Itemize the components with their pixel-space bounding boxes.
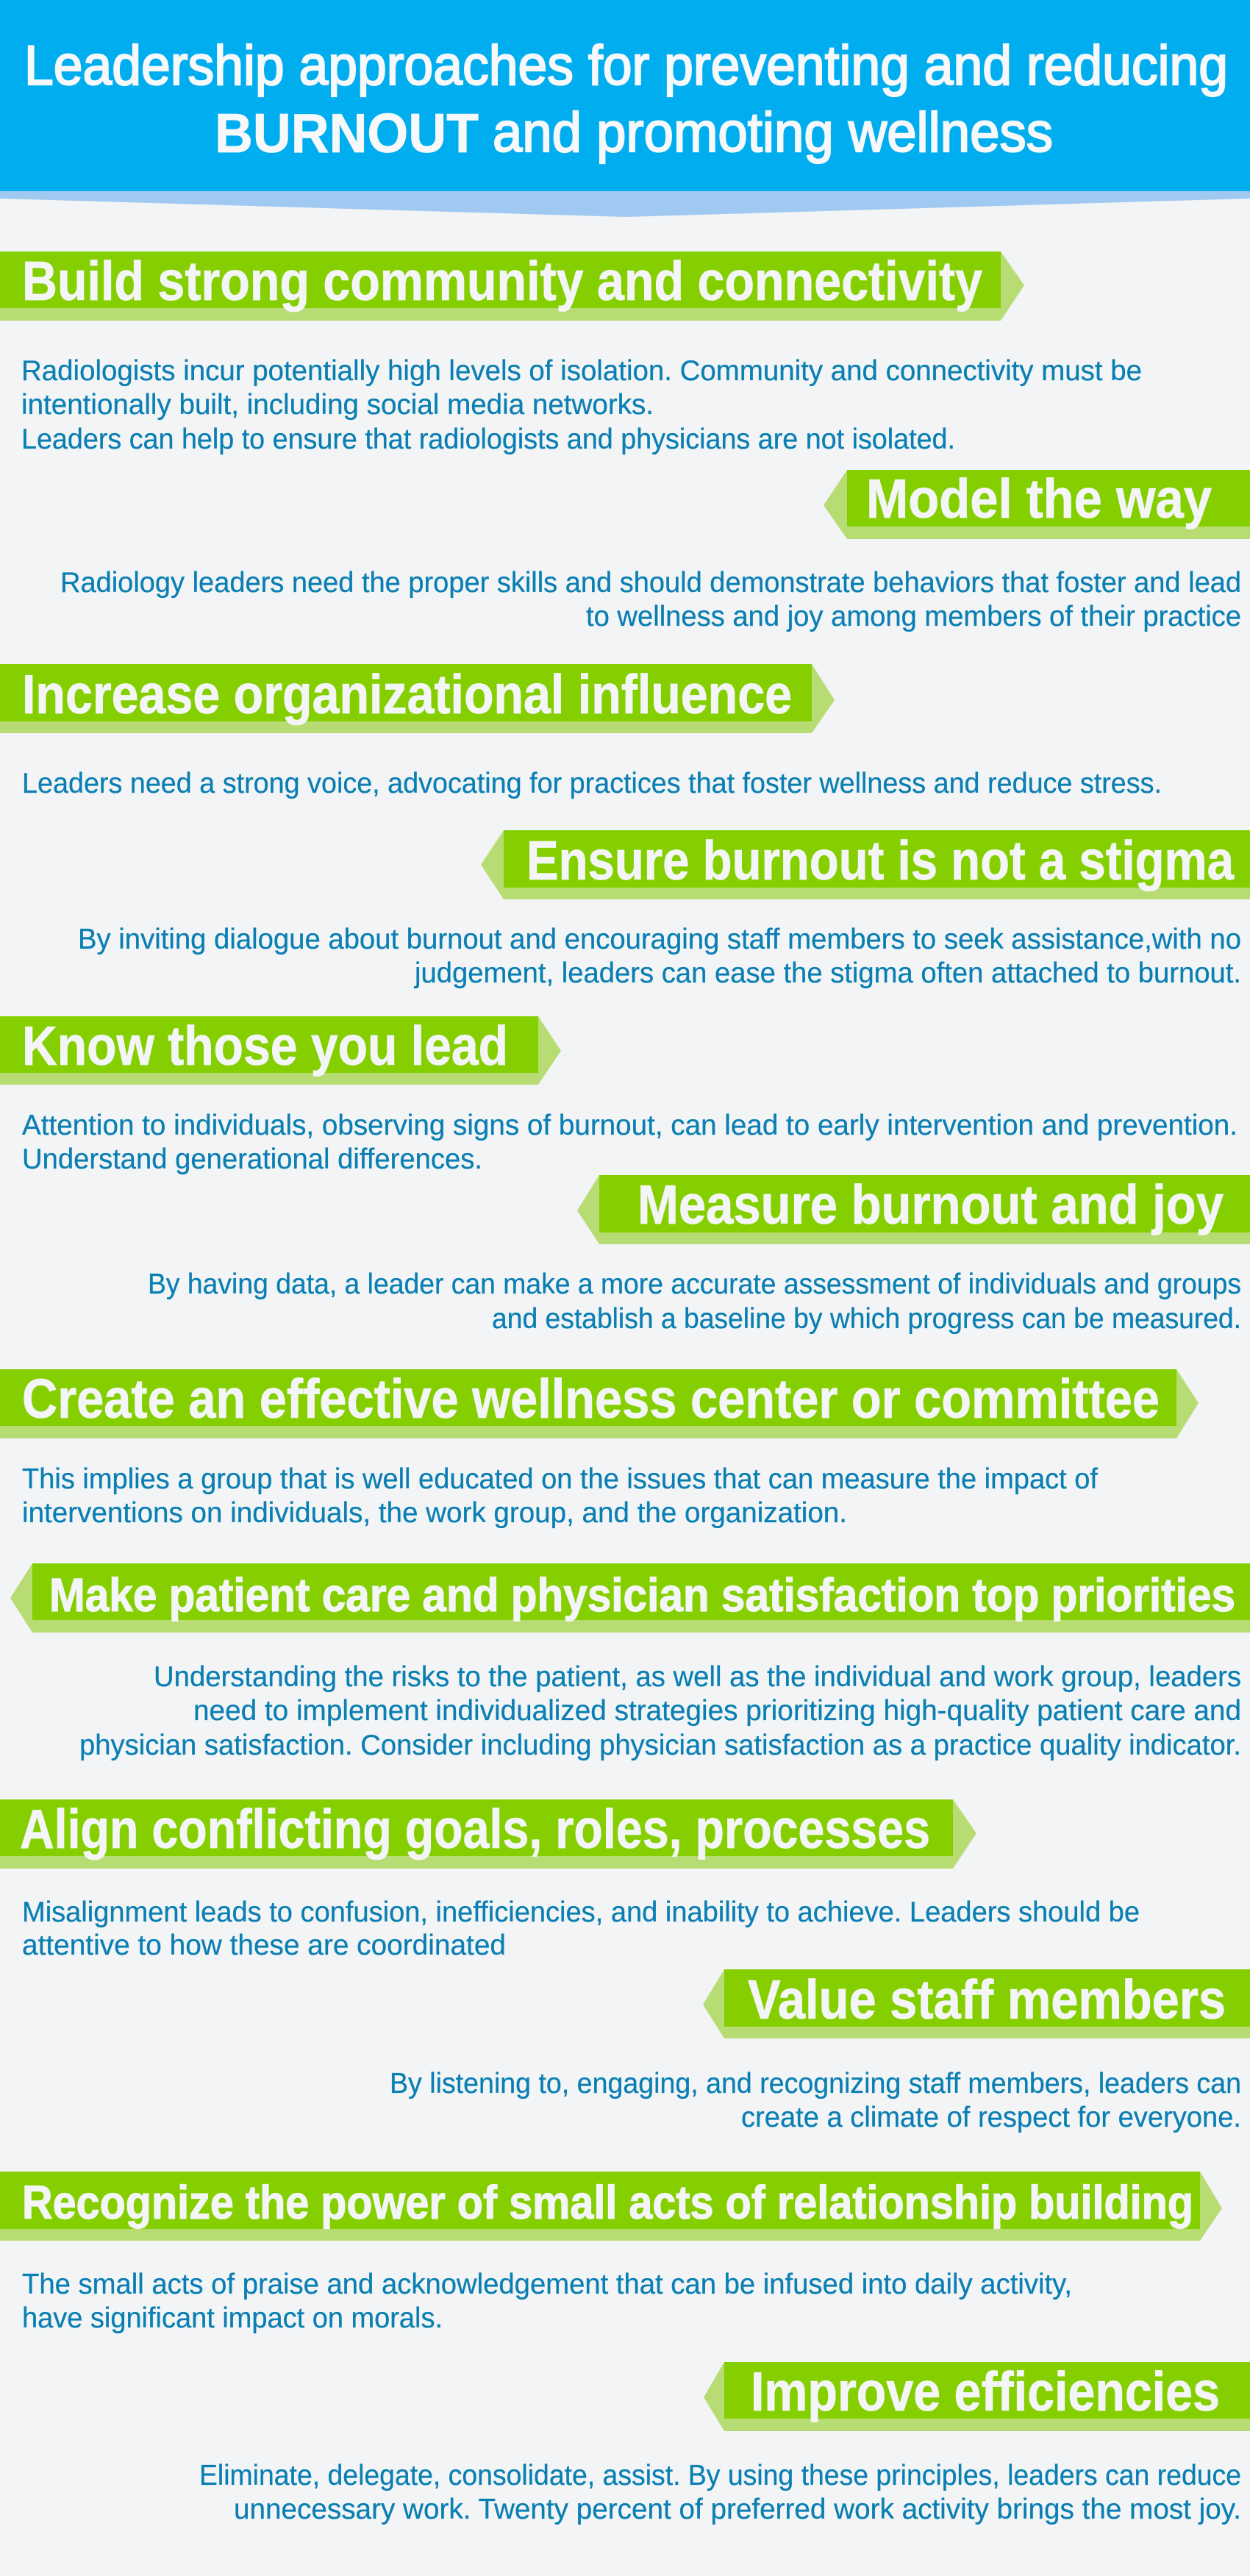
body text: create a climate of respect for everyone. xyxy=(741,2102,1241,2133)
body text xyxy=(22,1463,1098,1529)
banner: build strong community: Build strong community and connectivity xyxy=(22,250,982,312)
section: recognize small acts xyxy=(0,2172,1222,2334)
body text xyxy=(60,567,1241,632)
body text: attentive to how these are coordinated xyxy=(22,1930,506,1961)
banner: increase organizational influence: Increase organizational influence xyxy=(22,663,792,725)
banner: know those you lead: Know those you lead xyxy=(22,1015,508,1077)
body text xyxy=(22,1110,1238,1175)
body text: By listening to, engaging, and recognizing staff members, leaders can xyxy=(390,2068,1241,2099)
body text: Attention to individuals, observing signs of burnout, can lead to early intervention and prevention. xyxy=(22,1110,1238,1141)
body text: unnecessary work. Twenty percent of preferred work activity brings the most joy. xyxy=(234,2494,1241,2525)
banner: model the way: Model the way xyxy=(866,468,1212,529)
body text: have significant impact on morals. xyxy=(22,2302,443,2334)
section: measure burnout and joy xyxy=(148,1174,1250,1335)
section: improve efficiencies xyxy=(199,2361,1250,2525)
title: and promoting wellness xyxy=(493,101,1053,164)
body text: interventions on individuals, the work group, and the organization. xyxy=(22,1497,847,1529)
section: know those you lead xyxy=(0,1015,1238,1175)
body text: Understanding the risks to the patient, as well as the individual and work group, leaders xyxy=(154,1661,1241,1693)
body text: to wellness and joy among members of their practice xyxy=(586,601,1241,632)
body text: physician satisfaction. Consider including physician satisfaction as a practice quality indicator. xyxy=(79,1730,1241,1761)
section: make patient care top priorities xyxy=(10,1563,1250,1761)
body text: Misalignment leads to confusion, inefficiencies, and inability to achieve. Leaders should be xyxy=(22,1897,1140,1928)
title: BURNOUT xyxy=(215,102,479,164)
body text xyxy=(22,1897,1140,1961)
body text xyxy=(79,1661,1241,1761)
header chevron xyxy=(0,188,1250,217)
section: build strong community xyxy=(0,250,1142,455)
body text xyxy=(22,2269,1072,2334)
title xyxy=(24,35,1228,164)
banner: align conflicting goals: Align conflicting goals, roles, processes xyxy=(20,1798,930,1860)
body text: intentionally built, including social media networks. xyxy=(21,389,654,421)
body text xyxy=(78,924,1241,989)
body text: By inviting dialogue about burnout and encouraging staff members to seek assistance,with no xyxy=(78,924,1241,955)
body text xyxy=(21,355,1142,455)
section: align conflicting goals xyxy=(0,1798,1140,1961)
body text: Understand generational differences. xyxy=(22,1143,482,1175)
body text: Leaders need a strong voice, advocating for practices that foster wellness and reduce stress. xyxy=(22,768,1162,799)
section: value staff members xyxy=(390,1969,1250,2133)
header xyxy=(0,0,1250,217)
header band xyxy=(0,0,1250,191)
body text: The small acts of praise and acknowledgement that can be infused into daily activity, xyxy=(22,2269,1072,2300)
body text: need to implement individualized strategies prioritizing high-quality patient care and xyxy=(193,1695,1241,1727)
body text xyxy=(199,2460,1241,2525)
body text: Radiology leaders need the proper skills and should demonstrate behaviors that foster and lead xyxy=(60,567,1241,599)
section: model the way xyxy=(60,468,1250,632)
body text xyxy=(390,2068,1241,2133)
body text: This implies a group that is well educated on the issues that can measure the impact of xyxy=(22,1463,1098,1495)
body text: Leaders can help to ensure that radiologists and physicians are not isolated. xyxy=(21,424,955,455)
section: increase organizational influence xyxy=(0,663,1162,799)
section: ensure burnout is not a stigma xyxy=(78,829,1250,989)
body text: judgement, leaders can ease the stigma often attached to burnout. xyxy=(414,957,1241,989)
body text xyxy=(148,1269,1241,1335)
body text: Radiologists incur potentially high levels of isolation. Community and connectivity must be xyxy=(21,355,1142,387)
section: create an effective wellness center xyxy=(0,1368,1199,1529)
